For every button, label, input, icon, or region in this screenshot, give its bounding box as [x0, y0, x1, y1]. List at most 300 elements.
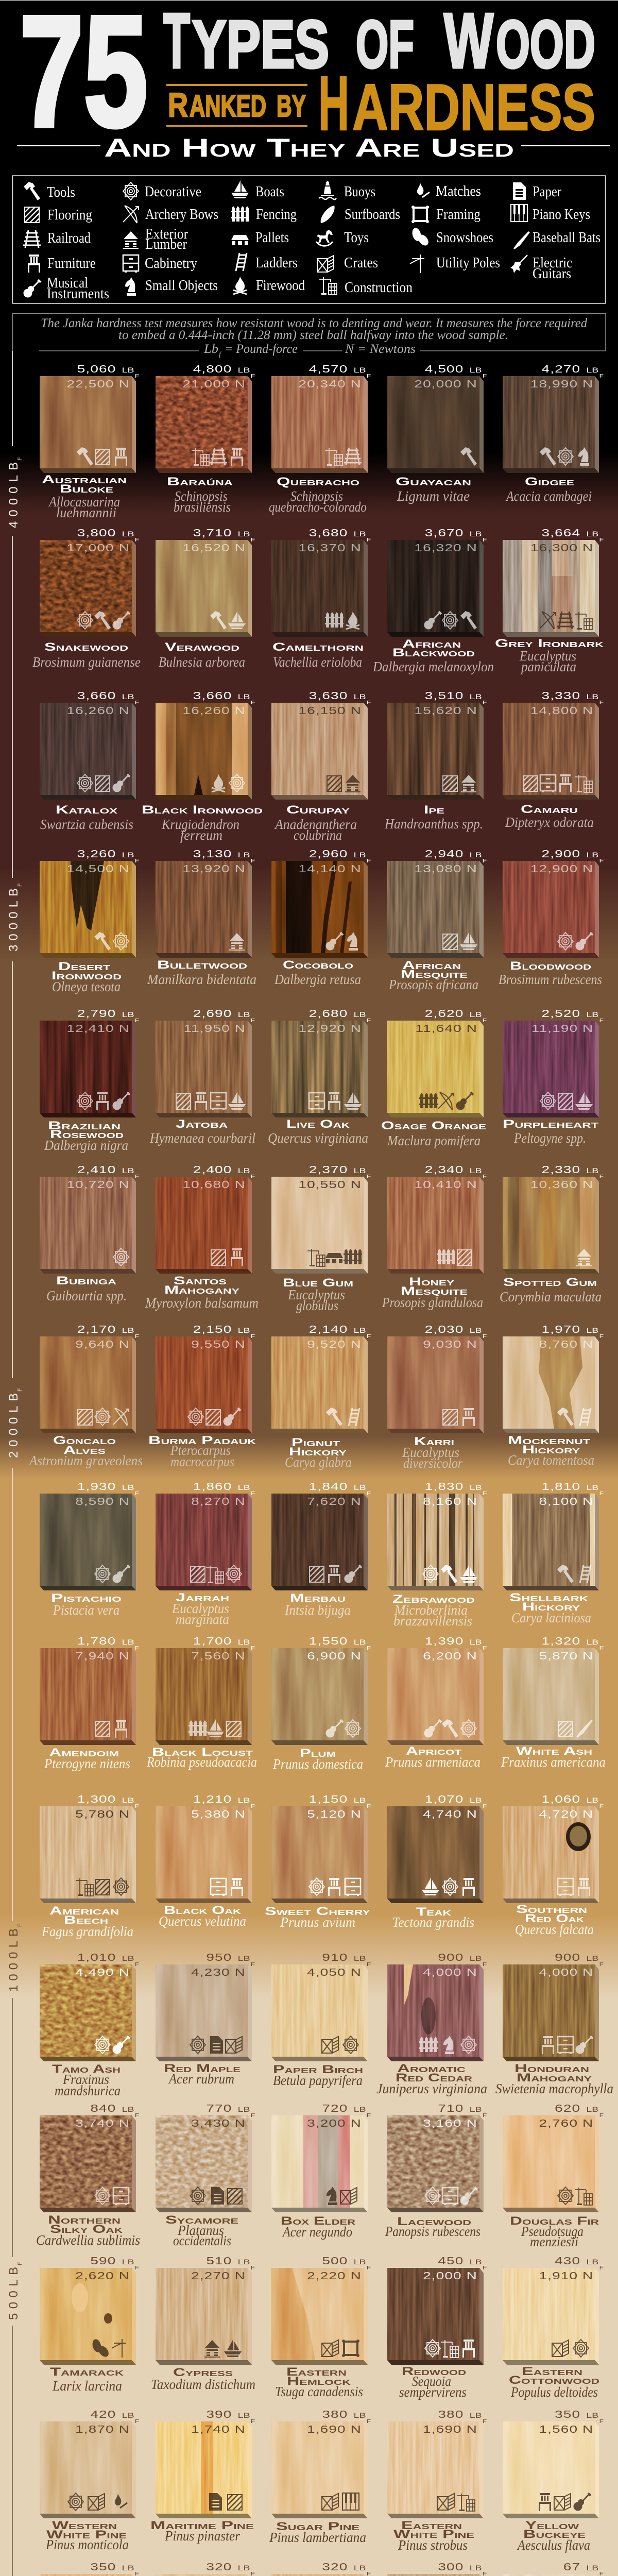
- hardness: [531, 1008, 604, 1035]
- name: Australian: [42, 473, 127, 486]
- legend labels: Electric: [533, 255, 572, 271]
- hardness: [539, 2103, 604, 2129]
- hardness: 3,660: [193, 690, 232, 702]
- subtitle: and how they are used: And How They Are Used: [104, 133, 514, 162]
- species: Guibourtia spp.: [46, 1288, 127, 1303]
- intro text: [41, 316, 587, 359]
- icons: [229, 933, 245, 951]
- species: Astronium graveolens: [28, 1453, 143, 1468]
- hardness: F: [135, 537, 139, 543]
- hardness: LB: [354, 1011, 366, 1019]
- hardness: LB: [470, 693, 482, 701]
- hardness: F: [251, 1018, 255, 1023]
- name: Bloodwood: [510, 959, 591, 972]
- name: Sycamore: [165, 2213, 238, 2226]
- card: Osage Orange: [381, 1008, 487, 1148]
- icons: [188, 1408, 241, 1426]
- hardness: LB: [238, 693, 250, 701]
- row 5: [40, 1008, 604, 1153]
- card: Goncalo Alves: [28, 1324, 143, 1468]
- swatch: [387, 1964, 479, 2057]
- swatch: [271, 2115, 364, 2208]
- name: [286, 2365, 351, 2387]
- name: White Ash: [516, 1744, 592, 1757]
- species: Taxodium distichum: [151, 2377, 255, 2392]
- hardness: LB: [470, 366, 482, 374]
- hardness: 1,320: [542, 1636, 580, 1647]
- species: Myroxylon balsamum: [145, 1295, 259, 1311]
- icons: [423, 1565, 477, 1583]
- swatch: [156, 703, 248, 795]
- intro text: = Pound-force: [225, 342, 298, 356]
- card: Ipe: [384, 690, 487, 832]
- name: Sugar Pine: [276, 2520, 359, 2533]
- hardness: 8,590 N: [75, 1496, 130, 1507]
- card: Pignut Hickory: [271, 1324, 371, 1470]
- subtitle: and how they are used: [17, 133, 610, 162]
- hardness: F: [251, 1490, 255, 1496]
- name: Hickory: [289, 1445, 347, 1458]
- card: Burma Padauk: [148, 1324, 256, 1469]
- name: Paper Birch: [273, 2063, 363, 2076]
- card: Purpleheart: [503, 1008, 604, 1146]
- name: [514, 2062, 592, 2084]
- legend labels: [47, 183, 600, 302]
- name: Burma Padauk: [148, 1434, 256, 1447]
- hardness: 16,150 N: [298, 705, 362, 717]
- legend labels: Paper: [533, 183, 561, 200]
- hardness: F: [251, 1803, 255, 1809]
- hardness: F: [367, 2265, 371, 2270]
- hardness: LB: [238, 1797, 250, 1804]
- swatch: [271, 2574, 364, 2576]
- hardness: 20,340 N: [298, 379, 362, 390]
- row 15: [26, 2562, 609, 2576]
- species: Pinus pinaster: [164, 2528, 240, 2544]
- species: [402, 1445, 462, 1471]
- name: Beech: [64, 1913, 108, 1926]
- card: Southern Red Oak: [503, 1794, 604, 1937]
- intro text: The Janka hardness test measures how resistant wood is to denting and wear. It measures the force required: [41, 316, 587, 330]
- species: Lignum vitae: [397, 488, 470, 504]
- name: Gidgee: [525, 475, 574, 488]
- hardness: 1,070: [425, 1794, 464, 1805]
- card: Monkey Puzzle: [262, 2562, 373, 2576]
- name: Red Oak: [525, 1912, 584, 1925]
- species: quebracho-colorado: [269, 499, 367, 515]
- name: Apricot: [406, 1744, 461, 1757]
- hardness: 13,080 N: [414, 863, 477, 875]
- hardness: 15,620 N: [414, 705, 477, 717]
- swatch: [271, 540, 364, 632]
- hardness: 16,520 N: [182, 543, 246, 554]
- icons: [325, 611, 359, 629]
- hardness: F: [251, 858, 255, 863]
- hardness: F: [367, 1018, 371, 1023]
- name: Mesquite: [401, 1284, 468, 1297]
- hardness: 510: [206, 2256, 232, 2267]
- species: [399, 2374, 467, 2400]
- species: Platanus: [177, 2223, 224, 2238]
- hardness: [66, 528, 139, 554]
- legend labels: Surfboards: [345, 206, 400, 223]
- hardness: 2,410: [77, 1164, 116, 1176]
- hardness: 16,300 N: [530, 543, 593, 554]
- species: Bulnesia arborea: [159, 654, 245, 670]
- hardness: LB: [470, 1797, 482, 1804]
- name: Hickory: [522, 1600, 580, 1613]
- swatch: [503, 1336, 595, 1429]
- hardness: LB: [354, 366, 366, 374]
- card: Desert Ironwood: [40, 849, 139, 994]
- species: Populus deltoides: [510, 2384, 598, 2400]
- hardness: 4,270: [542, 364, 580, 375]
- species: [48, 494, 120, 520]
- hardness: 900: [555, 1952, 580, 1963]
- hardness: F: [135, 1645, 139, 1651]
- hardness: F: [483, 2418, 487, 2424]
- name: Blue Gum: [283, 1276, 353, 1289]
- swatch: [387, 2421, 479, 2514]
- hardness: 10,360 N: [530, 1179, 593, 1191]
- icons: [443, 775, 476, 792]
- name: Maritime Pine: [150, 2519, 254, 2532]
- name: Merbau: [290, 1591, 346, 1604]
- legend labels: Buoys: [344, 183, 375, 200]
- icons: [327, 2187, 357, 2205]
- hardness: 900: [438, 1952, 464, 1963]
- icons: [95, 2036, 130, 2054]
- icons: [576, 1249, 592, 1266]
- hardness: 16,260 N: [182, 705, 246, 717]
- card: Quebracho: [269, 364, 371, 515]
- legend labels: Crates: [344, 255, 378, 271]
- swatch: [387, 2268, 479, 2360]
- row 9: [40, 1636, 606, 1772]
- hardness: F: [483, 1803, 487, 1809]
- axis label 1000: 1000LB: [7, 1928, 21, 1992]
- species: marginata: [176, 1612, 229, 1627]
- hardness: 3,740 N: [75, 2118, 130, 2129]
- name: Santos: [174, 1274, 227, 1287]
- hardness: 4,500: [425, 364, 464, 375]
- name: Snakewood: [44, 640, 128, 653]
- hardness: 10,680 N: [182, 1179, 246, 1191]
- swatch: [156, 2268, 248, 2360]
- species: Intsia bijuga: [284, 1602, 351, 1618]
- species: Dipteryx odorata: [505, 815, 594, 830]
- card: Maritime Pine: [150, 2409, 255, 2544]
- hardness: 620: [555, 2103, 580, 2114]
- species: Prunus domestica: [272, 1756, 363, 1772]
- hardness: LB: [238, 1327, 250, 1334]
- species: [55, 2072, 121, 2098]
- card: Red Maple: [156, 1952, 255, 2087]
- hardness: 390: [206, 2409, 232, 2420]
- icons: [540, 1092, 593, 1110]
- hardness: 1,860: [193, 1481, 232, 1493]
- title: [17, 0, 610, 162]
- hardness: 2,220 N: [307, 2270, 362, 2282]
- hardness: LB: [470, 1638, 482, 1646]
- legend labels: Exterior: [145, 226, 188, 242]
- card: Curupay: [271, 690, 371, 843]
- swatch: [503, 1177, 595, 1269]
- name: Tamarack: [50, 2365, 124, 2378]
- swatch: [271, 1021, 364, 1113]
- name: Camaru: [521, 803, 578, 816]
- hardness: F: [367, 700, 371, 705]
- name: [53, 1434, 116, 1456]
- hardness: 300: [438, 2562, 464, 2573]
- legend labels: Flooring: [47, 207, 92, 223]
- legend icons: [23, 180, 530, 298]
- icons: [325, 932, 358, 951]
- species: Carya tomentosa: [508, 1452, 594, 1468]
- species: Panopsis rubescens: [385, 2224, 480, 2239]
- hardness: 1,560 N: [539, 2424, 593, 2435]
- species: Vachellia erioloba: [273, 654, 362, 670]
- species: colubrina: [294, 827, 342, 843]
- name: Ironwood: [52, 969, 122, 982]
- swatch: [40, 2421, 132, 2514]
- hardness: F: [483, 537, 487, 543]
- hardness: LB: [238, 1484, 250, 1492]
- swatch: [503, 1964, 595, 2057]
- row 3: [40, 690, 604, 843]
- hardness: 11,950 N: [183, 1023, 246, 1035]
- name: Cottonwood: [509, 2374, 599, 2386]
- name: Alves: [63, 1444, 106, 1456]
- hardness: F: [483, 1018, 487, 1023]
- legend labels: Matches: [436, 183, 481, 199]
- name: Brazilian: [48, 1119, 121, 1132]
- species: mandshurica: [55, 2083, 121, 2098]
- hardness: [414, 528, 487, 554]
- species: [173, 2223, 231, 2248]
- name: [48, 2213, 123, 2235]
- icons: [443, 1408, 475, 1426]
- name: [289, 1436, 347, 1458]
- hardness: F: [251, 1961, 255, 1967]
- swatch: [156, 1648, 248, 1740]
- hardness: 430: [555, 2256, 580, 2267]
- card: Jatoba: [149, 1008, 255, 1146]
- card: Bulletwood: [147, 849, 256, 987]
- species: Maclura pomifera: [387, 1133, 480, 1148]
- hardness: 2,150: [193, 1324, 232, 1335]
- hardness: 18,990 N: [530, 379, 593, 390]
- hardness: F: [599, 373, 604, 379]
- icons: [419, 1092, 473, 1110]
- hardness: 1,780: [77, 1636, 116, 1647]
- card: Black Oak: [156, 1794, 255, 1929]
- hardness: [182, 849, 255, 875]
- hardness: F: [599, 537, 604, 543]
- hardness: LB: [238, 366, 250, 374]
- hardness: LB: [122, 1011, 134, 1019]
- card: Douglas Fir: [503, 2103, 604, 2249]
- name: Red Maple: [164, 2062, 241, 2075]
- icons: [77, 447, 127, 466]
- species: Eucalyptus: [171, 1601, 229, 1616]
- swatch: [40, 861, 132, 953]
- hardness: [530, 1164, 604, 1191]
- hardness: F: [251, 1333, 255, 1339]
- hardness: [423, 2409, 487, 2435]
- swatch: [40, 1648, 132, 1740]
- row 11: [40, 1952, 613, 2098]
- species: brazzavillensis: [393, 1613, 472, 1629]
- hardness: 8,100 N: [539, 1496, 593, 1507]
- swatch: [387, 540, 479, 632]
- row 8: [40, 1481, 604, 1629]
- hardness: 2,400: [193, 1164, 232, 1176]
- legend labels: Railroad: [47, 230, 91, 246]
- hardness: [307, 2562, 371, 2576]
- hardness: [191, 1636, 255, 1662]
- hardness: 3,510: [425, 690, 464, 702]
- hardness: 1,210: [193, 1794, 232, 1805]
- name: White Pine: [393, 2528, 474, 2540]
- name: Buloke: [60, 482, 113, 495]
- hardness: [182, 1164, 255, 1191]
- name: Eastern: [522, 2365, 582, 2378]
- species: [519, 648, 576, 674]
- icons: [113, 1248, 129, 1266]
- hardness: LB: [586, 1797, 598, 1804]
- swatch: [40, 1177, 132, 1269]
- hardness: 3,630: [309, 690, 348, 702]
- axis label 3000: F: [17, 883, 23, 887]
- hardness: [414, 364, 487, 390]
- hardness: F: [251, 373, 255, 379]
- hardness: LB: [586, 2106, 598, 2113]
- name: Sweet Cherry: [265, 1905, 370, 1918]
- icons: [78, 1408, 129, 1426]
- hardness: [423, 2103, 487, 2129]
- hardness: [307, 1324, 371, 1350]
- icons: [188, 1719, 241, 1737]
- hardness: LB: [470, 851, 482, 859]
- hardness: LB: [354, 1167, 366, 1175]
- hardness: 1,830: [425, 1481, 464, 1493]
- card: Atlantic White Cedar: [26, 2562, 149, 2576]
- icons: [542, 2036, 593, 2054]
- hardness: [423, 2562, 487, 2576]
- hardness: F: [367, 1490, 371, 1496]
- species: Brosimum rubescens: [499, 972, 602, 987]
- row 10: [40, 1794, 604, 1939]
- swatch: [503, 2574, 595, 2576]
- species: globulus: [296, 1298, 338, 1313]
- hardness: F: [483, 1490, 487, 1496]
- hardness: LB: [122, 1955, 134, 1962]
- hardness: [75, 2409, 139, 2435]
- name: Grey Ironbark: [495, 637, 604, 650]
- icons: [558, 2187, 592, 2205]
- hardness: F: [483, 2265, 487, 2270]
- swatch: [271, 376, 364, 468]
- name: [52, 960, 122, 982]
- hardness: F: [599, 1174, 604, 1179]
- icons: [325, 448, 362, 466]
- hardness: 1,840: [309, 1481, 348, 1493]
- heading line: ranked by hardness: R: [168, 86, 188, 124]
- species: [521, 2224, 583, 2249]
- name: Douglas Fir: [510, 2214, 599, 2227]
- hardness: LB: [470, 2412, 482, 2419]
- species: [393, 1602, 472, 1629]
- name: Baraúna: [167, 475, 233, 488]
- swatch: [40, 2115, 132, 2208]
- name: Tamo Ash: [52, 2062, 121, 2075]
- species: [287, 1287, 345, 1313]
- hardness: 7,560 N: [191, 1651, 246, 1662]
- species: Pterocarpus: [170, 1443, 231, 1458]
- name: Desert: [58, 960, 110, 973]
- species: Cardwellia sublimis: [36, 2232, 140, 2248]
- hardness: F: [135, 373, 139, 379]
- hardness: F: [367, 373, 371, 379]
- icons: [540, 612, 592, 630]
- species: luehmannii: [56, 505, 116, 520]
- species: Carya laciniosa: [511, 1610, 591, 1625]
- hardness: F: [367, 1333, 371, 1339]
- swatch: [40, 376, 132, 468]
- hardness: [414, 690, 487, 717]
- species: Anadenanthera: [274, 817, 357, 832]
- hardness: LB: [586, 2564, 598, 2572]
- hardness: 1,060: [542, 1794, 580, 1805]
- name: Jarrah: [176, 1591, 229, 1604]
- hardness: LB: [122, 1797, 134, 1804]
- hardness: LB: [354, 1638, 366, 1646]
- hardness: 380: [322, 2409, 348, 2420]
- hardness: LB: [122, 1484, 134, 1492]
- hardness: 2,140: [309, 1324, 348, 1335]
- species: Schinopsis: [175, 488, 228, 504]
- icons: [422, 1877, 475, 1896]
- legend labels: Lumber: [145, 236, 187, 252]
- hardness: LB: [354, 851, 366, 859]
- hardness: [530, 690, 604, 717]
- card: African Mesquite: [387, 849, 487, 992]
- row 4: [40, 849, 604, 994]
- swatch: [271, 1494, 364, 1586]
- legend labels: Fencing: [256, 206, 297, 223]
- icons: [438, 2494, 475, 2511]
- hardness: LB: [586, 2412, 598, 2419]
- hardness: 3,660: [77, 690, 116, 702]
- hardness: LB: [354, 2412, 366, 2419]
- heading line: ranked by hardness: BY: [277, 89, 306, 123]
- hardness: [191, 1794, 255, 1820]
- swatch: [40, 2268, 132, 2360]
- swatch: [40, 1806, 132, 1899]
- swatch: [271, 703, 364, 795]
- species: Handroanthus spp.: [384, 816, 483, 832]
- hardness: 1,010: [77, 1952, 116, 1963]
- swatch: [40, 1336, 132, 1429]
- hardness: [307, 1481, 371, 1507]
- card: Cocobolo: [271, 849, 371, 987]
- species: sempervirens: [399, 2384, 467, 2400]
- hardness: F: [135, 1490, 139, 1496]
- hardness: 8,760 N: [539, 1339, 593, 1350]
- hardness: [191, 1952, 255, 1978]
- axis label 500: F: [17, 2262, 23, 2265]
